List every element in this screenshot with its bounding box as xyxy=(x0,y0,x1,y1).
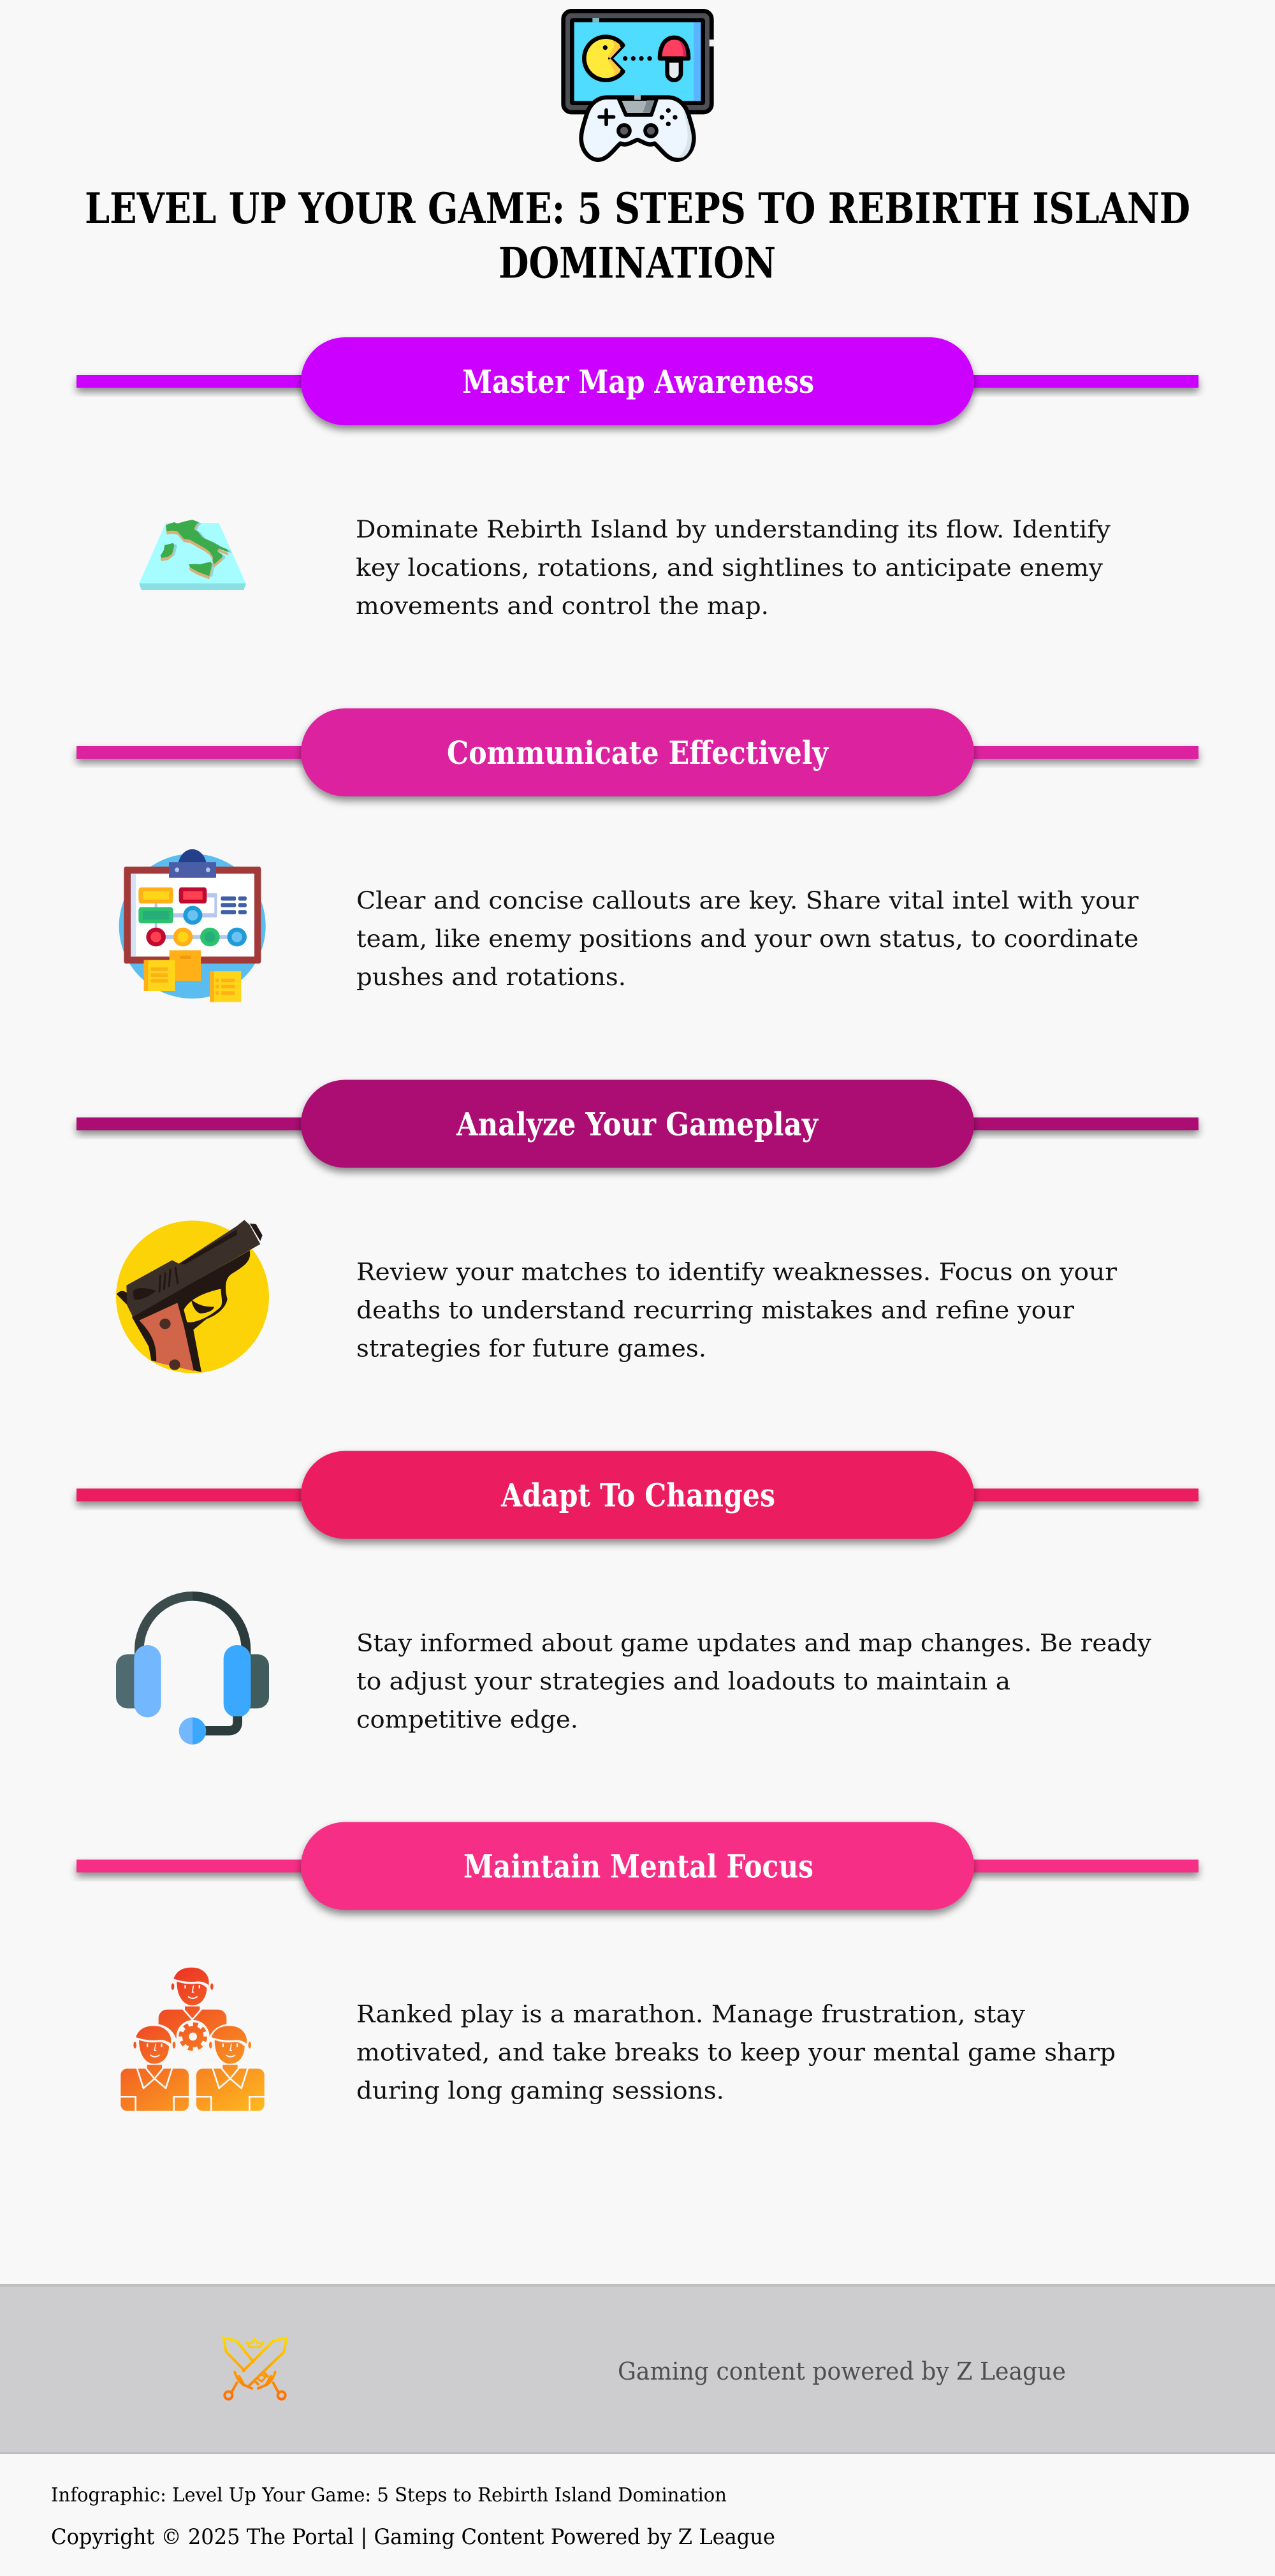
section 4: adapt to changes xyxy=(76,1451,1198,1745)
body text 2: Clear and concise callouts are key. Share vital intel with your xyxy=(356,887,1139,914)
body text 5: motivated, and take breaks to keep your mental game sharp xyxy=(356,2039,1116,2066)
icon: crossed swords xyxy=(224,2338,286,2399)
body text 1: movements and control the map. xyxy=(356,592,769,620)
heading bar 3: Analyze Your Gameplay xyxy=(456,1106,819,1143)
body text 4: to adjust your strategies and loadouts to maintain a xyxy=(356,1668,1010,1695)
icon: game monitor and controller xyxy=(564,11,715,160)
icon: pistol xyxy=(116,1220,269,1373)
body text 2 xyxy=(356,887,1139,991)
body text 5 xyxy=(356,2001,1116,2104)
heading bar 5: Maintain Mental Focus xyxy=(463,1848,813,1885)
heading bar 1 xyxy=(76,337,1198,425)
sponsor band xyxy=(0,2284,1275,2454)
body text 1: Dominate Rebirth Island by understanding its flow. Identify xyxy=(356,516,1111,543)
footer text: Copyright © 2025 The Portal | Gaming Content Powered by Z League xyxy=(51,2524,775,2550)
title xyxy=(85,184,1190,288)
footer text: Infographic: Level Up Your Game: 5 Steps to Rebirth Island Domination xyxy=(51,2484,727,2506)
heading bar 2: Communicate Effectively xyxy=(447,734,829,772)
body text 4 xyxy=(356,1630,1151,1733)
body text 2: team, like enemy positions and your own status, to coordinate xyxy=(356,925,1139,953)
heading bar 3 xyxy=(76,1080,1198,1168)
heading bar 4: Adapt To Changes xyxy=(500,1477,775,1514)
body text 3: Review your matches to identify weaknesses. Focus on your xyxy=(356,1259,1117,1285)
body text 3 xyxy=(356,1259,1117,1362)
body text 4: Stay informed about game updates and map changes. Be ready xyxy=(356,1630,1151,1657)
section 3: analyze your gameplay xyxy=(76,1080,1198,1373)
body text 4: competitive edge. xyxy=(356,1706,578,1733)
body text 3: strategies for future games. xyxy=(356,1335,706,1362)
heading bar 5 xyxy=(76,1822,1198,1910)
body text 1: key locations, rotations, and sightlines to anticipate enemy xyxy=(356,554,1103,582)
body text 2: pushes and rotations. xyxy=(356,963,626,991)
body text 1 xyxy=(356,516,1111,620)
body text 3: deaths to understand recurring mistakes and refine your xyxy=(356,1297,1074,1324)
icon: team with gear xyxy=(120,1968,265,2111)
body text 5: during long gaming sessions. xyxy=(356,2077,724,2104)
footer text xyxy=(51,2484,775,2550)
heading bar 4 xyxy=(76,1451,1198,1539)
icon: headset xyxy=(116,1596,269,1745)
section 1: master map awareness xyxy=(76,337,1198,620)
title: DOMINATION xyxy=(499,238,776,288)
heading bar 2 xyxy=(76,708,1198,796)
sponsor text: Gaming content powered by Z League xyxy=(618,2357,1066,2385)
heading bar 1: Master Map Awareness xyxy=(462,363,814,400)
section 2: communicate effectively xyxy=(76,708,1198,1002)
body text 5: Ranked play is a marathon. Manage frustration, stay xyxy=(356,2001,1025,2028)
icon: strategy board xyxy=(119,849,266,1002)
icon: island map xyxy=(139,520,246,590)
section 5: maintain mental focus xyxy=(76,1822,1198,2115)
